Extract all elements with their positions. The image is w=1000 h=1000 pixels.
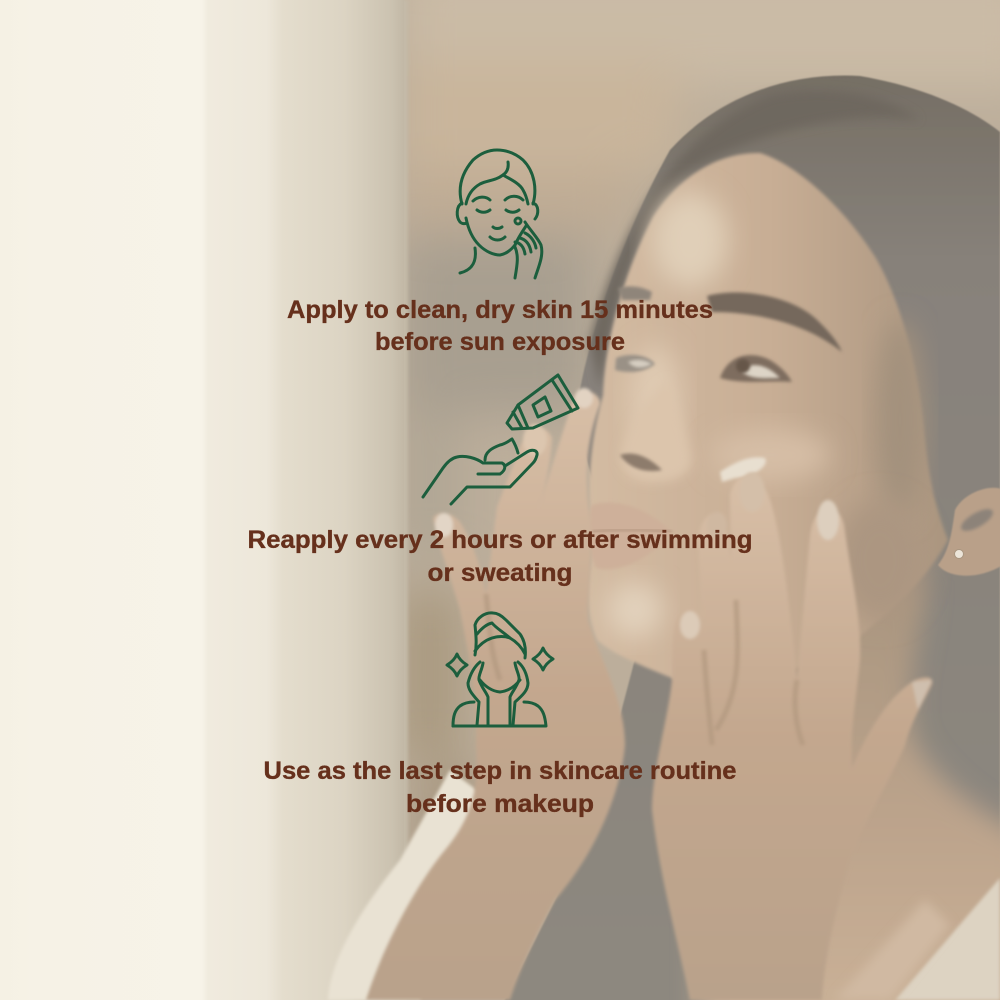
blouse sleeve bbox=[328, 770, 490, 1000]
step 1 text: before sun exposure bbox=[375, 328, 625, 356]
sunscreen on cheek bbox=[720, 457, 766, 482]
eyes bbox=[720, 355, 792, 382]
step 3 text: Use as the last step in skincare routine bbox=[264, 757, 737, 785]
lips bbox=[588, 502, 672, 569]
step 1 text bbox=[287, 296, 713, 356]
step 3 text: before makeup bbox=[406, 790, 594, 818]
icon: woman with towel wrap and sparkles bbox=[447, 613, 553, 726]
face light and shade bbox=[607, 192, 925, 638]
icon: tube squeezing cream onto hand bbox=[423, 375, 578, 504]
ear and earring bbox=[938, 488, 1000, 576]
face bbox=[588, 153, 948, 690]
hair bbox=[500, 76, 1000, 1000]
icon: face with finger applying cream bbox=[457, 150, 542, 278]
finger shadows bbox=[486, 594, 803, 745]
step 1 text: Apply to clean, dry skin 15 minutes bbox=[287, 296, 713, 324]
curtain bbox=[0, 0, 408, 1000]
right hand and forearm bbox=[652, 472, 932, 1000]
eyebrow bbox=[707, 293, 842, 352]
step 2 text: or sweating bbox=[428, 559, 572, 587]
step 2 text: Reapply every 2 hours or after swimming bbox=[248, 526, 752, 554]
step 2 text bbox=[248, 526, 752, 587]
nose bbox=[620, 380, 692, 482]
neck and chest bbox=[700, 580, 1000, 1000]
step 3 text bbox=[264, 757, 737, 818]
left hand and forearm bbox=[366, 388, 625, 1000]
blouse strap bbox=[895, 878, 1000, 1000]
